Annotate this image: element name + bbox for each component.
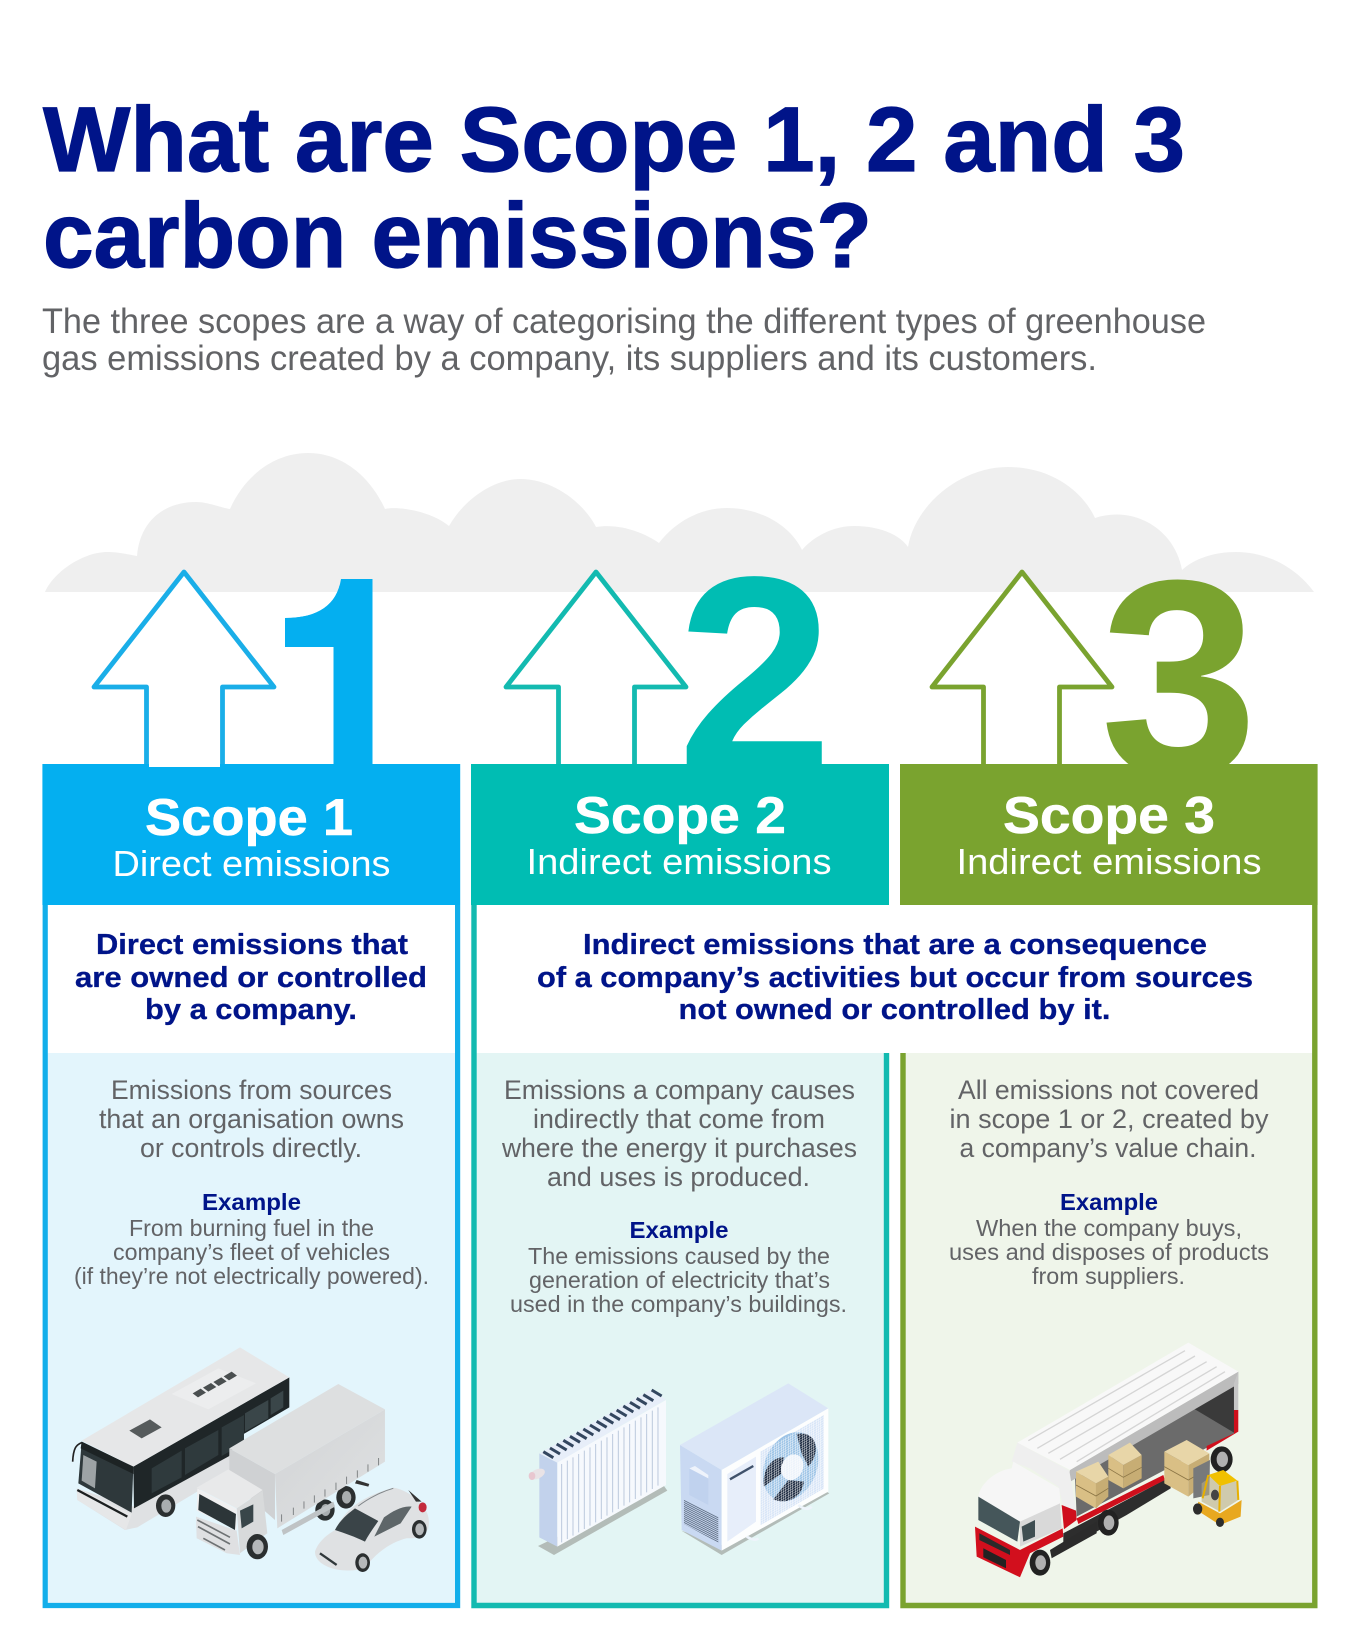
body text: scope 1: or controls directly. xyxy=(140,1133,362,1163)
header: scope 2: Indirect emissions xyxy=(526,841,832,882)
panel: scope 3 column xyxy=(903,905,1315,1606)
heat pump xyxy=(680,1383,829,1555)
forklift xyxy=(1193,1460,1242,1527)
example: scope 3: When the company buys, xyxy=(976,1215,1242,1241)
body text: scope 2: indirectly that come from xyxy=(533,1104,825,1134)
example: scope 2: Example xyxy=(630,1217,728,1243)
example: scope 2: used in the company’s buildings. xyxy=(510,1291,847,1317)
body text: scope 2: where the energy it purchases xyxy=(501,1133,857,1163)
body text: scope 1: that an organisation owns xyxy=(99,1104,404,1134)
example: scope 1: Example xyxy=(202,1189,301,1215)
lorry xyxy=(196,1384,385,1559)
arrow 3 xyxy=(932,572,1112,768)
header: scope 3 xyxy=(900,764,1318,905)
car xyxy=(315,1488,429,1572)
pallets xyxy=(1076,1440,1209,1508)
cab xyxy=(975,1446,1233,1577)
cloud background xyxy=(45,453,1314,592)
numeral 3: 3 xyxy=(1100,523,1258,835)
example: scope 1 xyxy=(74,1189,429,1289)
arrow 2 xyxy=(506,572,686,768)
header: scope 2 xyxy=(471,764,889,905)
body text: scope 3 xyxy=(950,1075,1269,1163)
title xyxy=(43,89,1185,287)
trailer xyxy=(1012,1343,1238,1550)
icon: delivery truck with forklift xyxy=(975,1343,1242,1577)
body text: scope 1 xyxy=(99,1075,404,1163)
example: scope 3: Example xyxy=(1060,1189,1158,1215)
numeral 2: 2 xyxy=(677,518,833,833)
header: scope 3: Scope 3 xyxy=(1003,787,1215,845)
example: scope 3: from suppliers. xyxy=(1032,1263,1185,1289)
lead text: scope 1: are owned or controlled xyxy=(75,962,427,994)
arrow 1 xyxy=(94,572,274,768)
icon: bus, lorry and car xyxy=(73,1347,429,1572)
bus xyxy=(73,1347,289,1530)
lead text: scope 1: Direct emissions that xyxy=(96,929,408,961)
panel: scope 1 column xyxy=(45,905,458,1606)
example: scope 1: (if they’re not electrically powered). xyxy=(74,1263,429,1289)
title: What are Scope 1, 2 and 3 xyxy=(43,89,1185,191)
radiator xyxy=(528,1390,667,1555)
header: scope 2: Scope 2 xyxy=(574,787,786,845)
lead text: scope 2 and 3: Indirect emissions that are a consequence xyxy=(583,929,1207,961)
header: scope 1: Scope 1 xyxy=(145,789,353,847)
lead text: scope 1: by a company. xyxy=(145,994,357,1026)
header: scope 1: Direct emissions xyxy=(112,843,390,884)
icon: radiator and air-source heat pump xyxy=(528,1383,829,1555)
example: scope 2: The emissions caused by the xyxy=(528,1243,830,1269)
panel: scope 2 column xyxy=(474,905,886,1606)
example: scope 2: generation of electricity that’s xyxy=(529,1267,830,1293)
example: scope 1: company’s fleet of vehicles xyxy=(113,1239,390,1265)
body text: scope 3: All emissions not covered xyxy=(958,1075,1259,1105)
subtitle: gas emissions created by a company, its suppliers and its customers. xyxy=(42,339,1097,378)
body text: scope 1: Emissions from sources xyxy=(111,1075,392,1105)
subtitle: The three scopes are a way of categorising the different types of greenhouse xyxy=(42,302,1206,341)
lead text: scope 2 and 3: not owned or controlled by it. xyxy=(678,994,1110,1026)
example: scope 2 xyxy=(510,1217,847,1317)
body text: scope 2: Emissions a company causes xyxy=(504,1075,855,1105)
example: scope 3 xyxy=(949,1189,1269,1289)
body text: scope 3: in scope 1 or 2, created by xyxy=(950,1104,1269,1134)
numeral 1: 1 xyxy=(255,526,411,838)
title: carbon emissions? xyxy=(43,185,872,287)
header: scope 1 xyxy=(42,764,460,905)
body text: scope 2: and uses is produced. xyxy=(547,1162,810,1192)
example: scope 3: uses and disposes of products xyxy=(949,1239,1269,1265)
lead text: scope 1 xyxy=(75,929,427,1026)
example: scope 1: From burning fuel in the xyxy=(129,1215,374,1241)
header: scope 3: Indirect emissions xyxy=(956,841,1262,882)
lead text: scope 2 and 3: of a company’s activities but occur from sources xyxy=(537,962,1253,994)
body text: scope 2 xyxy=(501,1075,857,1192)
subtitle xyxy=(42,302,1206,378)
body text: scope 3: a company’s value chain. xyxy=(960,1133,1256,1163)
lead text: scope 2 and 3 xyxy=(537,929,1253,1026)
